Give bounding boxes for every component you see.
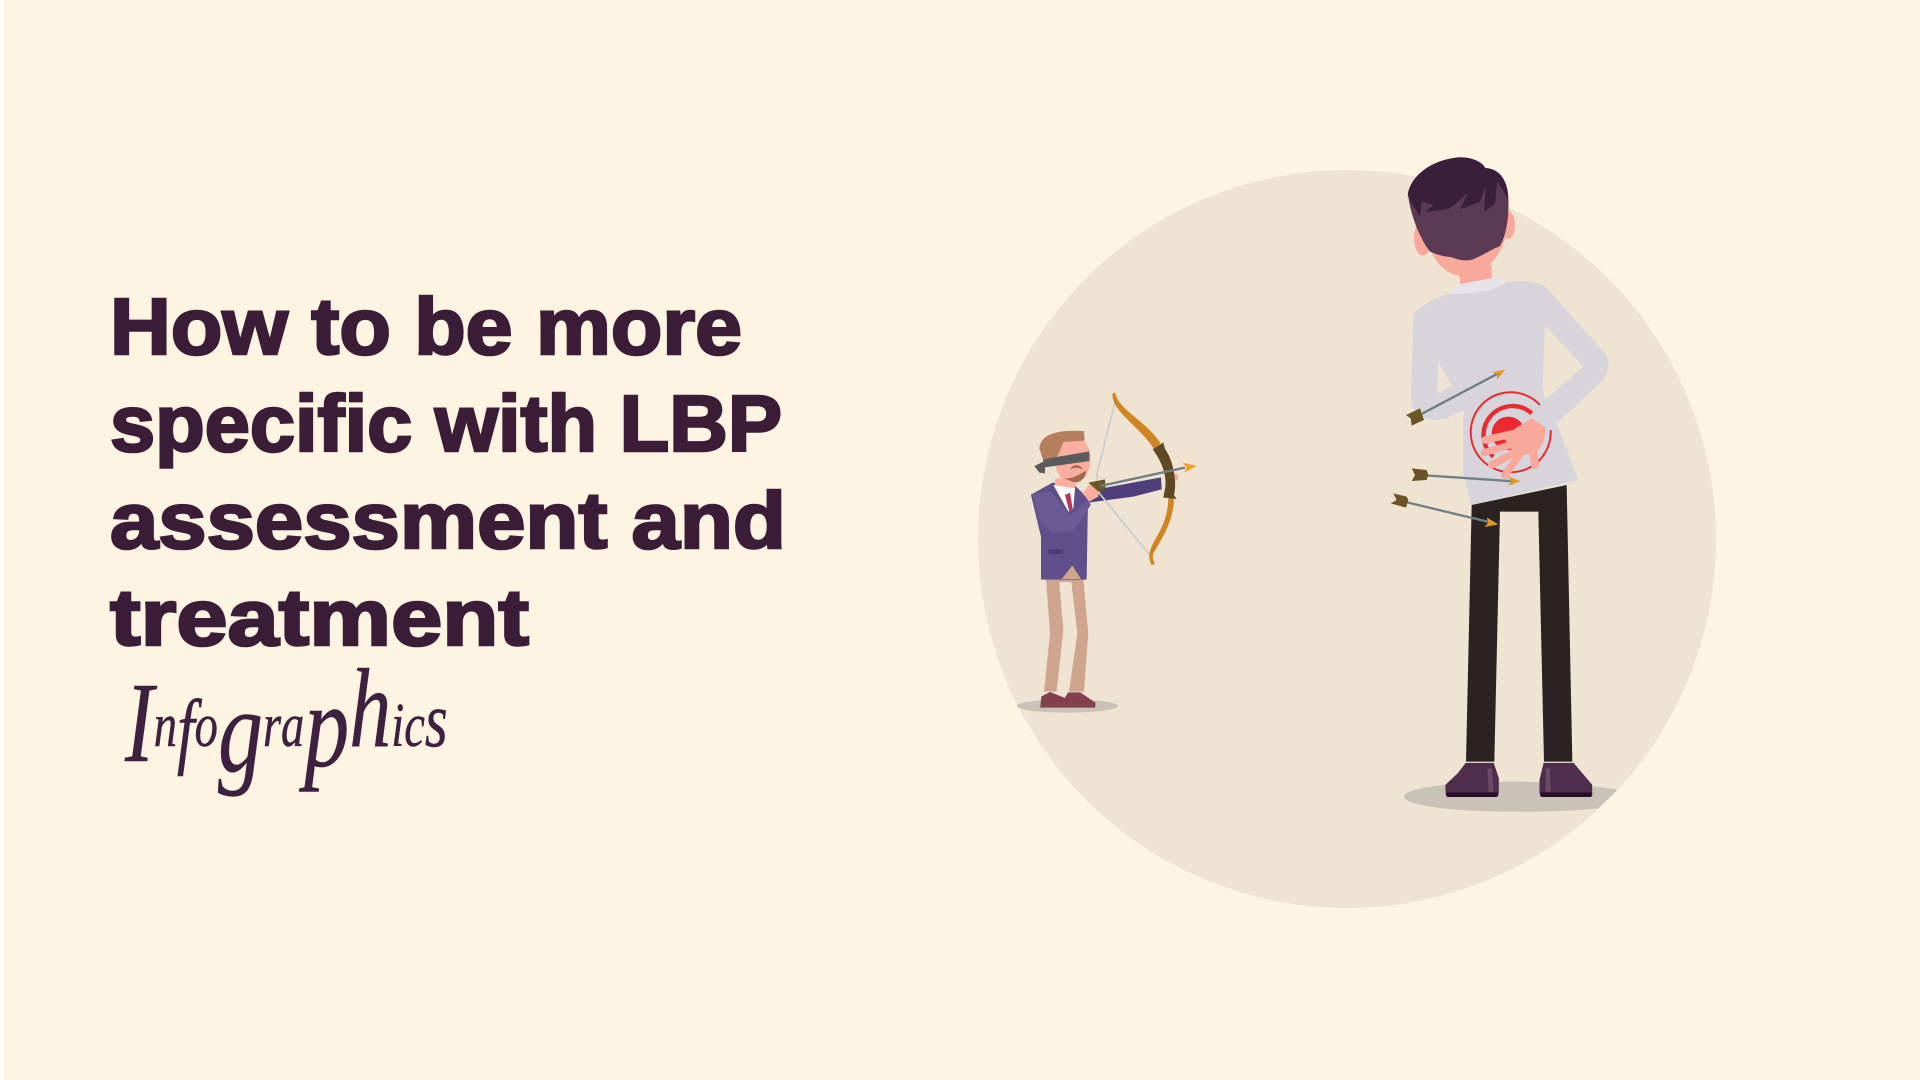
archer beard	[1064, 471, 1086, 482]
illustration: blindfolded archer	[1017, 393, 1197, 713]
arrow 1	[1406, 369, 1506, 426]
bow grip	[1153, 442, 1177, 499]
shirt	[1411, 281, 1609, 505]
subtitle: Infographics script: I	[124, 658, 157, 786]
target rings	[1471, 392, 1551, 472]
left shoe	[1446, 763, 1498, 793]
archer shoes	[1041, 692, 1095, 707]
arrow 3	[1391, 493, 1498, 527]
bowstring	[1097, 403, 1149, 554]
subtitle: Infographics script: o	[195, 691, 218, 760]
ground shadow	[1404, 782, 1617, 812]
jacket lapel notch	[1062, 566, 1081, 579]
glove	[1088, 479, 1106, 492]
title: assessment and	[110, 476, 786, 565]
right shoe	[1540, 763, 1592, 793]
archer drawing arm	[1085, 477, 1162, 502]
archer shadow	[1017, 699, 1118, 713]
subtitle: Infographics script: ics	[391, 677, 448, 763]
archer head	[1055, 435, 1091, 483]
archer neck	[1055, 478, 1075, 490]
illustration: man with back pain	[1404, 157, 1617, 812]
subtitle: Infographics script: h	[349, 648, 391, 771]
archer shirt	[1053, 485, 1075, 512]
blindfold	[1034, 451, 1089, 473]
subtitle: Infographics script: f	[177, 683, 202, 777]
background circle	[978, 170, 1716, 908]
shoe highlights	[1487, 768, 1551, 792]
archer hand on bow	[1170, 473, 1178, 481]
ears	[1414, 211, 1515, 256]
pain target and arrows	[1391, 369, 1551, 527]
archer tie	[1065, 493, 1073, 512]
title: specific with LBP	[110, 379, 782, 468]
gap between arm and torso, right	[1543, 325, 1583, 400]
subtitle: Infographics script: p	[298, 659, 349, 792]
arrow head	[1182, 463, 1197, 473]
bow limbs	[1112, 393, 1174, 565]
hand	[1484, 418, 1546, 475]
archer hair	[1039, 431, 1085, 461]
hair upper	[1408, 157, 1508, 217]
subtitle: Infographics script: n	[154, 691, 177, 760]
title	[110, 282, 786, 662]
head	[1427, 207, 1507, 277]
archer drawing hand	[1083, 483, 1099, 502]
neck	[1459, 265, 1492, 287]
jacket pocket	[1049, 549, 1063, 554]
archer jacket	[1032, 483, 1087, 579]
subtitle: Infographics script: ra	[263, 691, 304, 760]
hair lower	[1408, 173, 1509, 260]
subtitle: Infographics script: g	[218, 664, 263, 797]
shoe soles	[1446, 792, 1592, 797]
trousers	[1466, 485, 1572, 762]
collar	[1448, 277, 1507, 294]
gap between arm and torso, left	[1437, 362, 1452, 394]
archer mustache	[1070, 465, 1083, 469]
arrow shaft	[1100, 468, 1185, 486]
arrow 2	[1412, 468, 1521, 486]
jacket front arm	[1033, 492, 1090, 532]
title: How to be more	[110, 282, 742, 371]
archer legs	[1044, 579, 1088, 692]
title: treatment	[110, 573, 529, 662]
